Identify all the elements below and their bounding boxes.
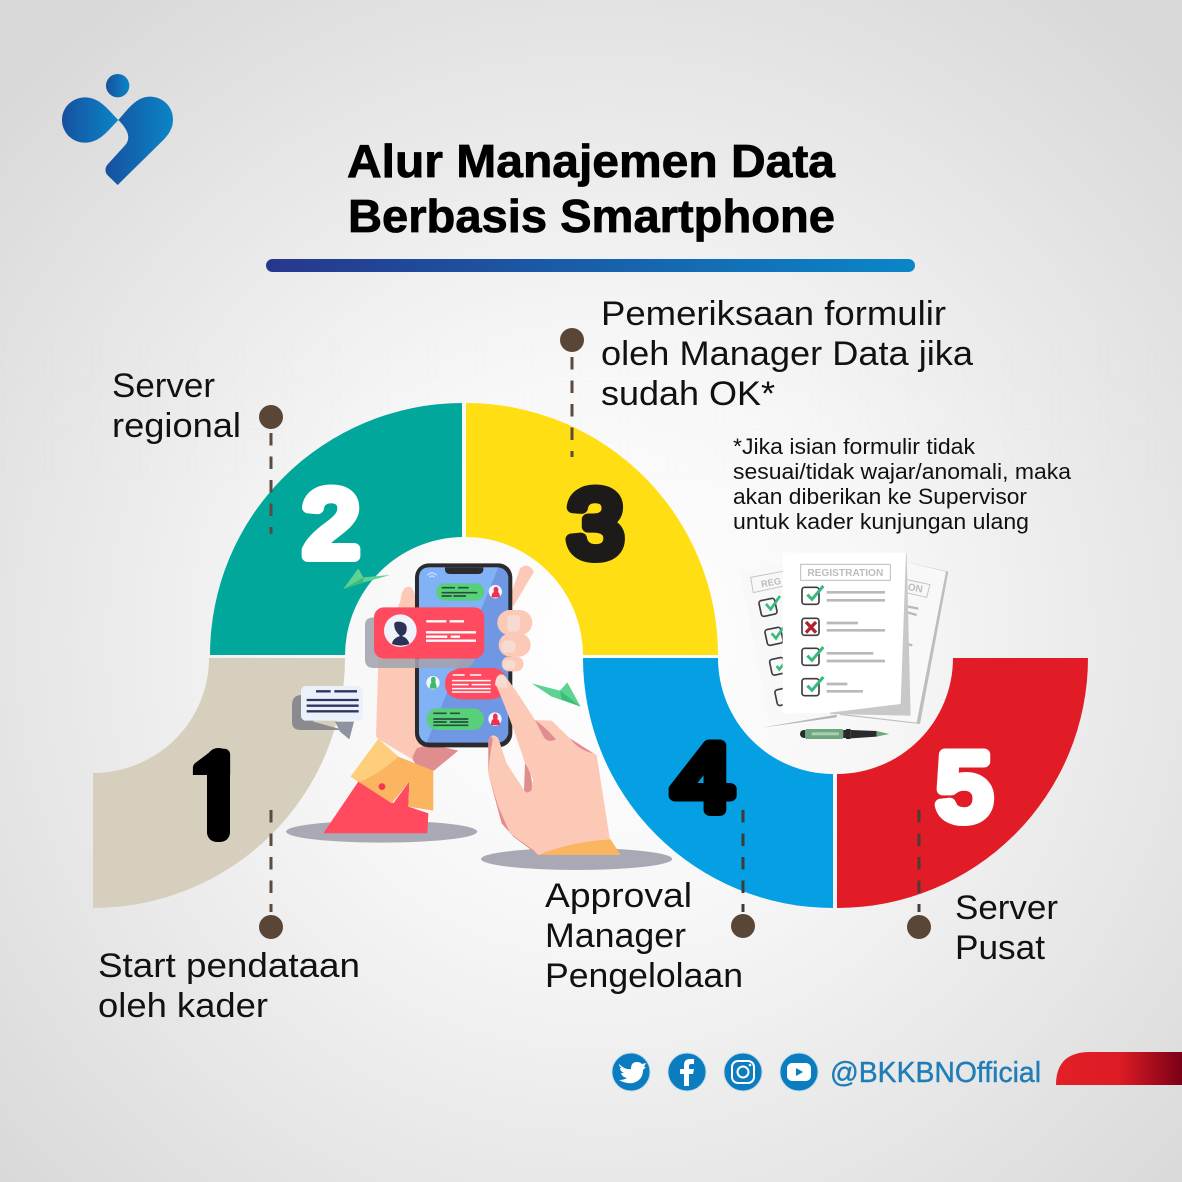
shadow left: [286, 821, 477, 843]
label 1: start pendataan: [98, 947, 360, 1025]
registration forms illustration: ON: [907, 582, 923, 596]
segment 3: yellow: [466, 403, 718, 655]
red bubble mid: [426, 668, 507, 699]
front sheet shadow: [830, 553, 911, 716]
label 3: pemeriksaan formulir: sudah OK*: [601, 375, 775, 413]
left palm: [376, 587, 457, 770]
back sheet left: [763, 715, 837, 727]
label 5: server pusat: Server: [955, 889, 1058, 927]
label 4: approval: Manager: [545, 917, 686, 955]
label 1: start pendataan: oleh kader: [98, 987, 268, 1025]
pen: [800, 729, 889, 739]
chat bubble icon: [292, 686, 363, 739]
title: Berbasis Smartphone: [348, 190, 835, 242]
label 4: approval: Pengelolaan: [545, 957, 743, 995]
green bubble bottom: [427, 708, 502, 730]
number 2: 2: [303, 471, 359, 576]
number 5: 5: [937, 734, 992, 839]
number 1: 1: [188, 730, 248, 862]
thumb behind phone: [510, 566, 534, 607]
label 2: server regional: regional: [112, 407, 241, 445]
button: [379, 783, 385, 790]
cuff: [351, 739, 433, 811]
red card shadow: [365, 617, 475, 668]
label 2: server regional: Server: [112, 367, 215, 405]
registration forms illustration: REGISTRATION: [807, 568, 883, 579]
logo: [62, 74, 173, 185]
fingers: [497, 610, 532, 671]
label 3: pemeriksaan formulir: Pemeriksaan formulir: [601, 295, 946, 333]
segment 2: teal: [210, 403, 462, 655]
title: Alur Manajemen Data: [347, 135, 835, 187]
social handle: @BKKBNOfficial: [830, 1057, 1041, 1089]
footnote: *Jika isian formulir tidak: [733, 434, 976, 459]
label 3: pemeriksaan formulir: oleh Manager Data jika: [601, 335, 973, 373]
number 4: 4: [673, 725, 733, 830]
red profile card: [374, 607, 484, 659]
segment 5: red: [837, 658, 1088, 908]
connector 3: [560, 328, 584, 457]
footnote: untuk kader kunjungan ulang: [733, 509, 1029, 534]
label 1: start pendataan: Start pendataan: [98, 947, 360, 985]
connector 5: [907, 810, 931, 939]
registration forms illustration: [740, 548, 948, 739]
smartphone illustration: [286, 563, 672, 870]
social icon: youtube: [780, 1053, 818, 1091]
label 5: server pusat: Pusat: [955, 929, 1046, 967]
paper plane top: [343, 568, 390, 589]
connector 1: [259, 810, 283, 939]
connector 4: [731, 810, 755, 938]
number 1: [192, 748, 230, 842]
label 3: pemeriksaan formulir: [601, 295, 973, 413]
segment 1: beige: [93, 658, 345, 908]
footnote: sesuai/tidak wajar/anomali, maka: [733, 459, 1072, 484]
connector 2: [259, 405, 283, 534]
right hand: [488, 674, 621, 855]
label 4: approval: Approval: [545, 877, 692, 915]
green bubble top: [436, 583, 502, 601]
phone: [415, 563, 512, 747]
social icon: facebook: [668, 1053, 706, 1091]
cuff light: [351, 739, 398, 782]
segment 4: blue: [583, 658, 833, 908]
title: [347, 135, 835, 242]
number 3: 3: [568, 471, 623, 576]
front sheet: [783, 553, 906, 713]
palm shade: [413, 744, 458, 771]
footnote: [733, 434, 1072, 534]
social icon: twitter: [612, 1053, 650, 1091]
label 4: approval: [545, 877, 743, 995]
registration forms illustration: REG: [760, 576, 782, 589]
left sleeve: [323, 782, 428, 833]
footnote: akan diberikan ke Supervisor: [733, 484, 1027, 509]
red tab: [1056, 1052, 1182, 1085]
shadow right: [481, 848, 672, 870]
paper plane right: [532, 682, 581, 707]
label 5: server pusat: [955, 889, 1058, 967]
title underline bar: [266, 259, 915, 272]
back sheet right: [840, 560, 948, 724]
label 2: server regional: [112, 367, 241, 445]
social icon: instagram: [724, 1053, 762, 1091]
